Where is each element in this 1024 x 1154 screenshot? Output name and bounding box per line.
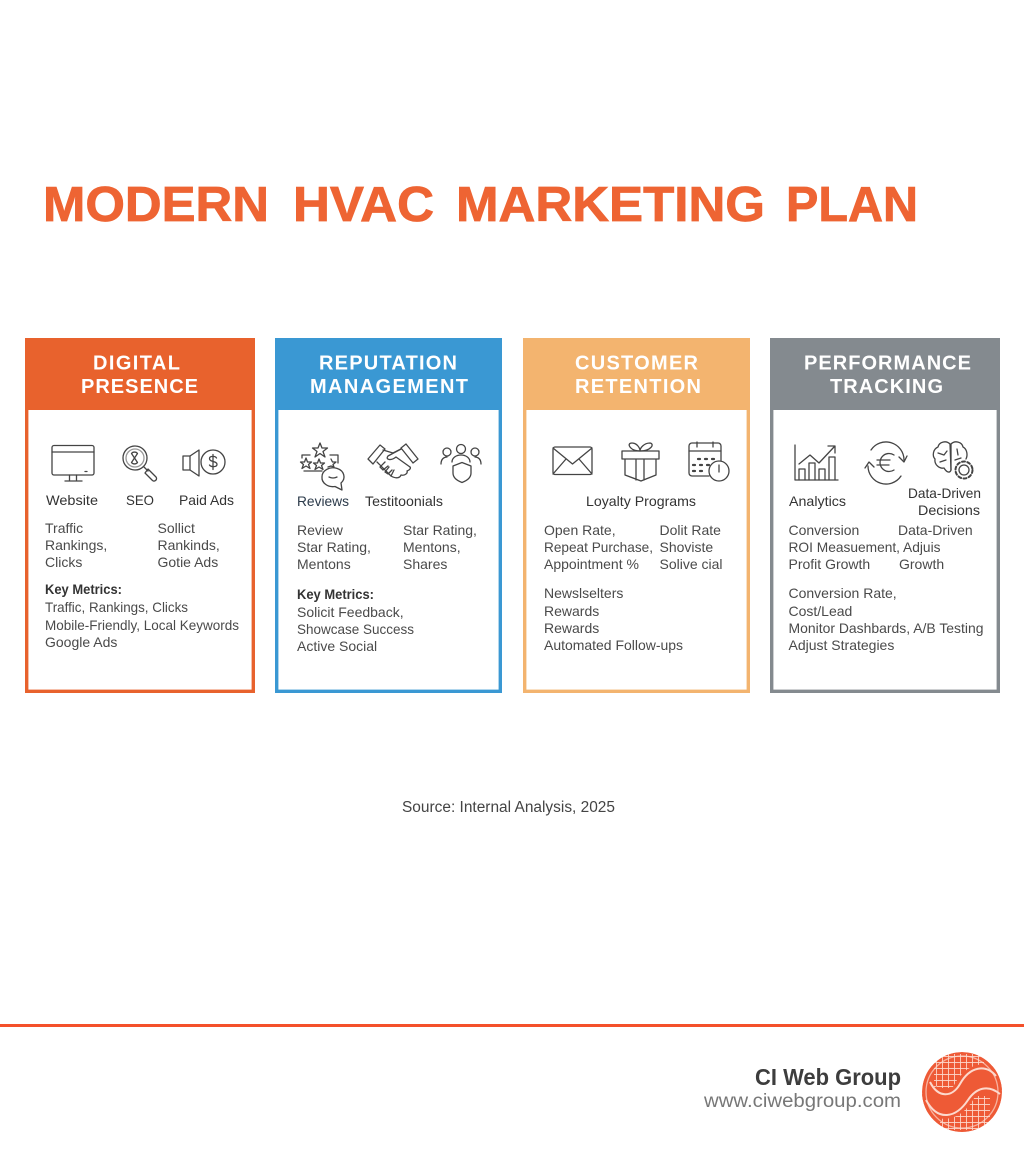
panel header: performance tracking bbox=[770, 338, 1000, 410]
panel header: customer retention: CUSTOMER bbox=[575, 352, 699, 374]
text block: actions list: Cost/Lead bbox=[788, 603, 852, 619]
panel header: digital presence bbox=[25, 338, 255, 410]
text block: programs list bbox=[544, 585, 683, 653]
footer divider bbox=[0, 1024, 1024, 1027]
text block: left column: Mentons bbox=[297, 556, 351, 572]
label: website: Website bbox=[46, 492, 98, 508]
label: loyalty programs: Loyalty Programs bbox=[586, 493, 696, 509]
text block: left column: Repeat Purchase, bbox=[544, 539, 653, 555]
panel header: performance tracking: TRACKING bbox=[830, 376, 943, 398]
icon: euro cycle bbox=[865, 442, 907, 484]
text block: right column bbox=[158, 520, 220, 570]
panel: customer retention bbox=[523, 338, 750, 691]
text block: programs list: Rewards bbox=[544, 620, 599, 636]
text block: left column: Traffic bbox=[45, 520, 83, 536]
label: testimonials: Testitoonials bbox=[365, 493, 443, 509]
text block: left column: Conversion bbox=[788, 522, 859, 538]
panel header: reputation management bbox=[275, 338, 502, 410]
text block: left column bbox=[544, 522, 653, 572]
text block: actions list: Adjust Strategies bbox=[788, 637, 894, 653]
text block: left column: Review bbox=[297, 522, 344, 538]
title: MODERN bbox=[43, 178, 269, 232]
text block: programs list: Rewards bbox=[544, 603, 599, 619]
title: PLAN bbox=[786, 178, 918, 232]
label: data-driven decisions: Data-Driven bbox=[908, 485, 981, 501]
footer brand name: CI Web Group bbox=[755, 1064, 901, 1090]
text block: right column bbox=[403, 522, 477, 572]
panel header: digital presence: PRESENCE bbox=[81, 376, 198, 398]
text block: right column: Growth bbox=[899, 556, 944, 572]
text block: key metrics: Mobile-Friendly, Local Keywords bbox=[45, 617, 239, 633]
text block: right column: Mentons, bbox=[403, 539, 461, 555]
text block: actions list: Monitor Dashbards, A/B Testing bbox=[788, 620, 984, 636]
text block: right column: Dolit Rate bbox=[660, 522, 721, 538]
icon: team with shield bbox=[441, 444, 481, 482]
text block: left column bbox=[788, 522, 940, 572]
text block: right column: Data-Driven bbox=[898, 522, 973, 538]
text block: key metrics: Key Metrics: bbox=[297, 586, 374, 602]
text block: key metrics: Traffic, Rankings, Clicks bbox=[45, 599, 188, 615]
label: reviews: Reviews bbox=[297, 493, 349, 509]
text block: programs list: Newslselters bbox=[544, 585, 623, 601]
icon: gift box bbox=[622, 443, 659, 481]
text block: left column: Open Rate, bbox=[544, 522, 616, 538]
text block: right column bbox=[898, 522, 973, 572]
panel header: reputation management: MANAGEMENT bbox=[310, 376, 468, 398]
text block: left column: Clicks bbox=[45, 554, 82, 570]
text block: left column: Rankings, bbox=[45, 537, 107, 553]
panel: reputation management bbox=[275, 338, 502, 691]
text block: right column: Gotie Ads bbox=[158, 554, 218, 570]
text block: key metrics: Key Metrics: bbox=[45, 581, 122, 597]
text block: left column: Profit Growth bbox=[788, 556, 870, 572]
panel header: performance tracking: PERFORMANCE bbox=[804, 352, 971, 374]
text block: right column: Rankinds, bbox=[158, 537, 220, 553]
text block: programs list: Automated Follow-ups bbox=[544, 637, 683, 653]
footer website: www.ciwebgroup.com bbox=[703, 1091, 901, 1112]
text block: key metrics: Google Ads bbox=[45, 634, 117, 650]
label: data-driven decisions: Decisions bbox=[918, 502, 980, 518]
text block: left column: ROI Measuement, Adjuis bbox=[788, 539, 940, 555]
text block: left column bbox=[45, 520, 107, 570]
panel: performance tracking bbox=[770, 338, 1000, 691]
text block: right column bbox=[660, 522, 723, 572]
icon: brain with gear bbox=[933, 442, 972, 478]
text block: right column: Sollict bbox=[158, 520, 195, 536]
logo: CI Web Group globe bbox=[922, 1052, 1002, 1132]
title: HVAC bbox=[293, 178, 434, 232]
text block: left column bbox=[297, 522, 371, 572]
icon: reviews stars and speech bubble bbox=[300, 443, 344, 490]
text block: right column: Shoviste bbox=[660, 539, 713, 555]
text block: key metrics bbox=[297, 586, 414, 654]
text block: right column: Star Rating, bbox=[403, 522, 477, 538]
label: SEO: SEO bbox=[126, 492, 154, 508]
text block: key metrics: Active Social bbox=[297, 638, 377, 654]
text block: left column: Appointment % bbox=[544, 556, 639, 572]
text block: key metrics: Showcase Success bbox=[297, 621, 414, 637]
label: paid ads: Paid Ads bbox=[179, 492, 234, 508]
panel header: customer retention bbox=[523, 338, 750, 410]
text block: right column: Shares bbox=[403, 556, 447, 572]
source note: Source: Internal Analysis, 2025 bbox=[402, 799, 615, 816]
icon: analytics chart bbox=[795, 445, 838, 480]
panel: digital presence bbox=[25, 338, 255, 691]
text block: right column: Solive cial bbox=[660, 556, 723, 572]
icon: SEO magnifier bbox=[123, 446, 156, 481]
title: MARKETING bbox=[456, 178, 765, 232]
text block: key metrics: Solicit Feedback, bbox=[297, 604, 404, 620]
label: analytics: Analytics bbox=[789, 493, 846, 509]
panel header: reputation management: REPUTATION bbox=[319, 352, 457, 374]
icon: handshake bbox=[368, 444, 418, 478]
text block: key metrics bbox=[45, 581, 239, 650]
panel header: digital presence: DIGITAL bbox=[93, 352, 180, 374]
icon: paid ads megaphone bbox=[183, 450, 225, 476]
icon: calendar and clock bbox=[689, 442, 729, 481]
icon: envelope bbox=[553, 447, 592, 474]
title bbox=[43, 178, 918, 232]
text block: actions list bbox=[788, 585, 984, 653]
icon: website monitor bbox=[52, 446, 94, 481]
text block: actions list: Conversion Rate, bbox=[788, 585, 897, 601]
text block: left column: Star Rating, bbox=[297, 539, 371, 555]
label: data-driven decisions bbox=[908, 485, 981, 518]
panel header: customer retention: RETENTION bbox=[575, 376, 701, 398]
